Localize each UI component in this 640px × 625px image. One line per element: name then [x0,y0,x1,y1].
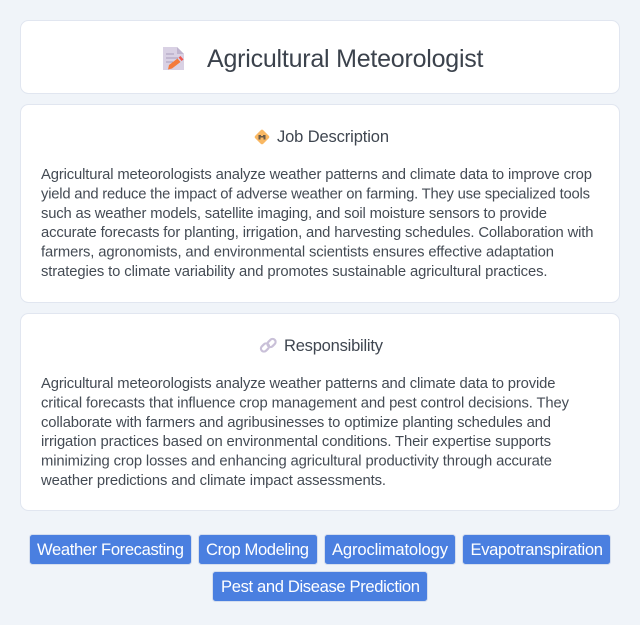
text block: job description: accurate forecasts for planting, irrigation, and harvesting schedules. Collaboration with [41,225,594,241]
icon: document with pencil [163,47,184,70]
text block: responsibility: critical forecasts that influence crop management and pest control decisions. They [41,395,570,411]
panel: job description [20,104,620,302]
title: Agricultural Meteorologist [207,45,484,73]
text block: job description: Agricultural meteorologists analyze weather patterns and climate data to improve crop [41,167,592,183]
text block: job description: yield and reduce the impact of adverse weather on farming. They use specialized tools [41,186,590,202]
text block: job description: such as weather models, satellite imaging, and soil moisture sensors to provide [41,206,547,222]
text block: responsibility: Agricultural meteorologists analyze weather patterns and climate data to provide [41,376,556,392]
text block: responsibility: weather predictions and climate impact assessments. [40,473,386,489]
text block: job description: strategies to climate variability and promotes sustainable agricultural practices. [41,264,548,280]
text block: job description [41,167,594,280]
text block: responsibility: collaborate with farmers and agribusinesses to optimize planting schedules and [41,415,551,431]
text block: responsibility: irrigation practices based on environmental conditions. Their expertise supports [41,434,551,450]
panel: title card [20,20,620,94]
tag: crop modeling [198,534,318,564]
tag: pest and disease prediction: Pest and Disease Prediction [221,577,420,596]
text block: job description: farmers, agronomists, and environmental scientists ensures effective adaptation [41,245,554,261]
text block: responsibility: minimizing crop losses and enhancing agricultural productivity through accurate [41,454,552,470]
tag: weather forecasting [30,534,192,564]
tag: pest and disease prediction [212,572,428,602]
skill tags [30,534,610,602]
tag: agroclimatology [324,534,456,564]
tag: agroclimatology: Agroclimatology [332,540,449,559]
tag: crop modeling: Crop Modeling [206,540,309,559]
tag: evapotranspiration: Evapotranspiration [470,540,603,559]
panel: responsibility [20,314,620,510]
text block: responsibility [40,376,570,489]
tag: weather forecasting: Weather Forecasting [37,540,184,559]
heading: responsibility: Responsibility [284,337,384,355]
icon: orange diamond sign [254,129,270,145]
icon: chain link [260,338,277,353]
heading: job description: Job Description [277,128,389,146]
tag: evapotranspiration [462,534,610,564]
